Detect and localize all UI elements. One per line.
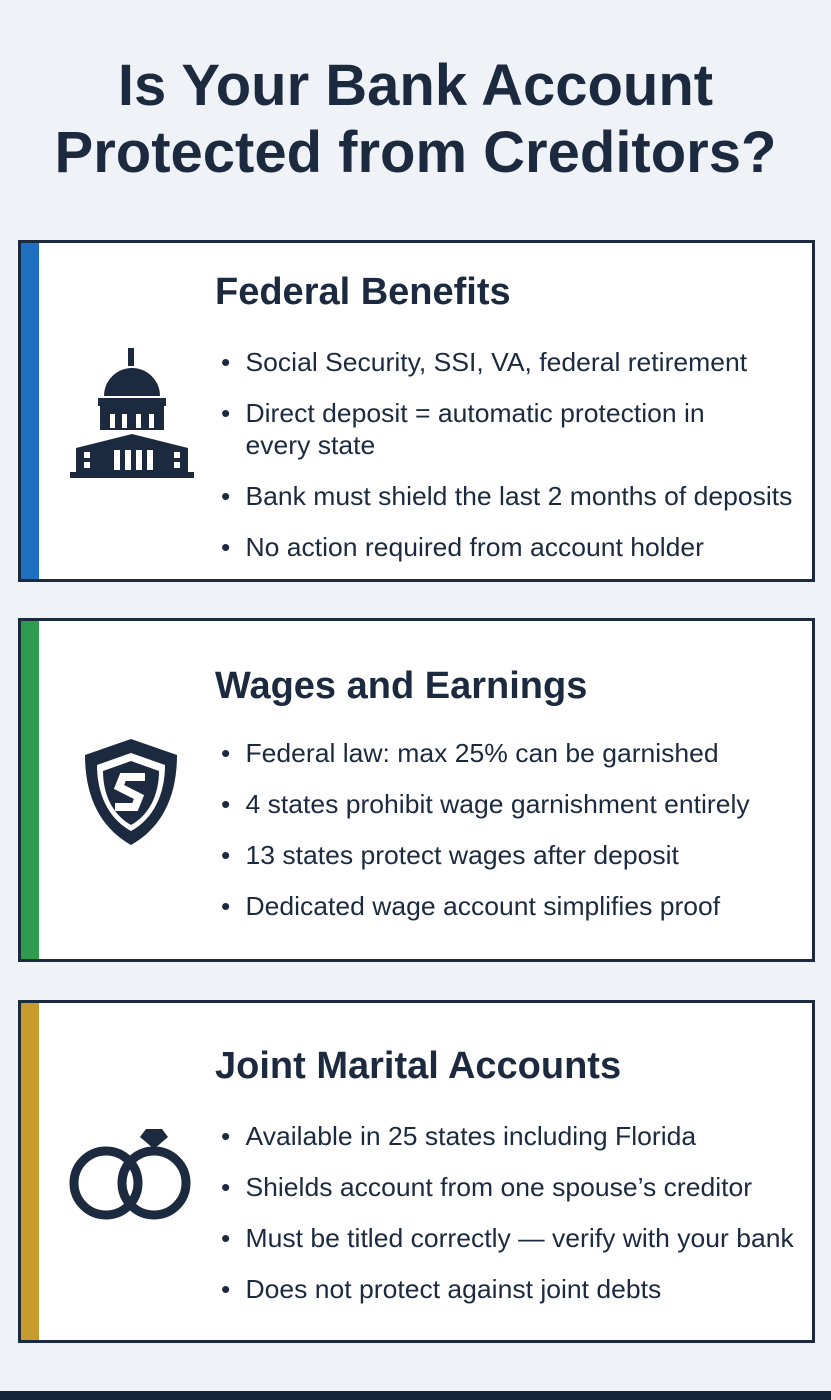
bullet list: Social Security, SSI, VA, federal retirement [245,347,747,377]
panel: joint accounts [18,1000,815,1343]
bullet list: Available in 25 states including Florida [245,1121,696,1151]
icon: capitol [70,348,194,478]
bullet list [222,347,792,562]
bullet list: Must be titled correctly — verify with your bank [245,1223,794,1253]
bullet list: 4 states prohibit wage garnishment entirely [245,789,750,819]
panel: wages [18,618,815,962]
bullet list: Shields account from one spouse’s creditor [245,1172,752,1202]
title: Protected from Creditors? [55,120,776,185]
icon: rings [70,1129,190,1220]
bullet list: Bank must shield the last 2 months of deposits [245,481,792,511]
bullet list: Dedicated wage account simplifies proof [245,891,720,921]
heading: federal benefits: Federal Benefits [215,271,511,313]
heading: joint accounts: Joint Marital Accounts [215,1045,621,1087]
bullet list: every state [245,430,375,460]
heading: wages: Wages and Earnings [215,665,587,707]
bullet list [222,1121,794,1304]
title: Is Your Bank Account [118,53,713,118]
bullet list: Federal law: max 25% can be garnished [245,738,719,768]
bullet list: Direct deposit = automatic protection in [245,398,705,428]
title [55,53,776,185]
bullet list: No action required from account holder [245,532,704,562]
panel: federal benefits [18,240,815,582]
bullet list [222,738,750,921]
bullet list: 13 states protect wages after deposit [245,840,679,870]
bullet list: Does not protect against joint debts [245,1274,661,1304]
icon: shield [85,739,177,845]
